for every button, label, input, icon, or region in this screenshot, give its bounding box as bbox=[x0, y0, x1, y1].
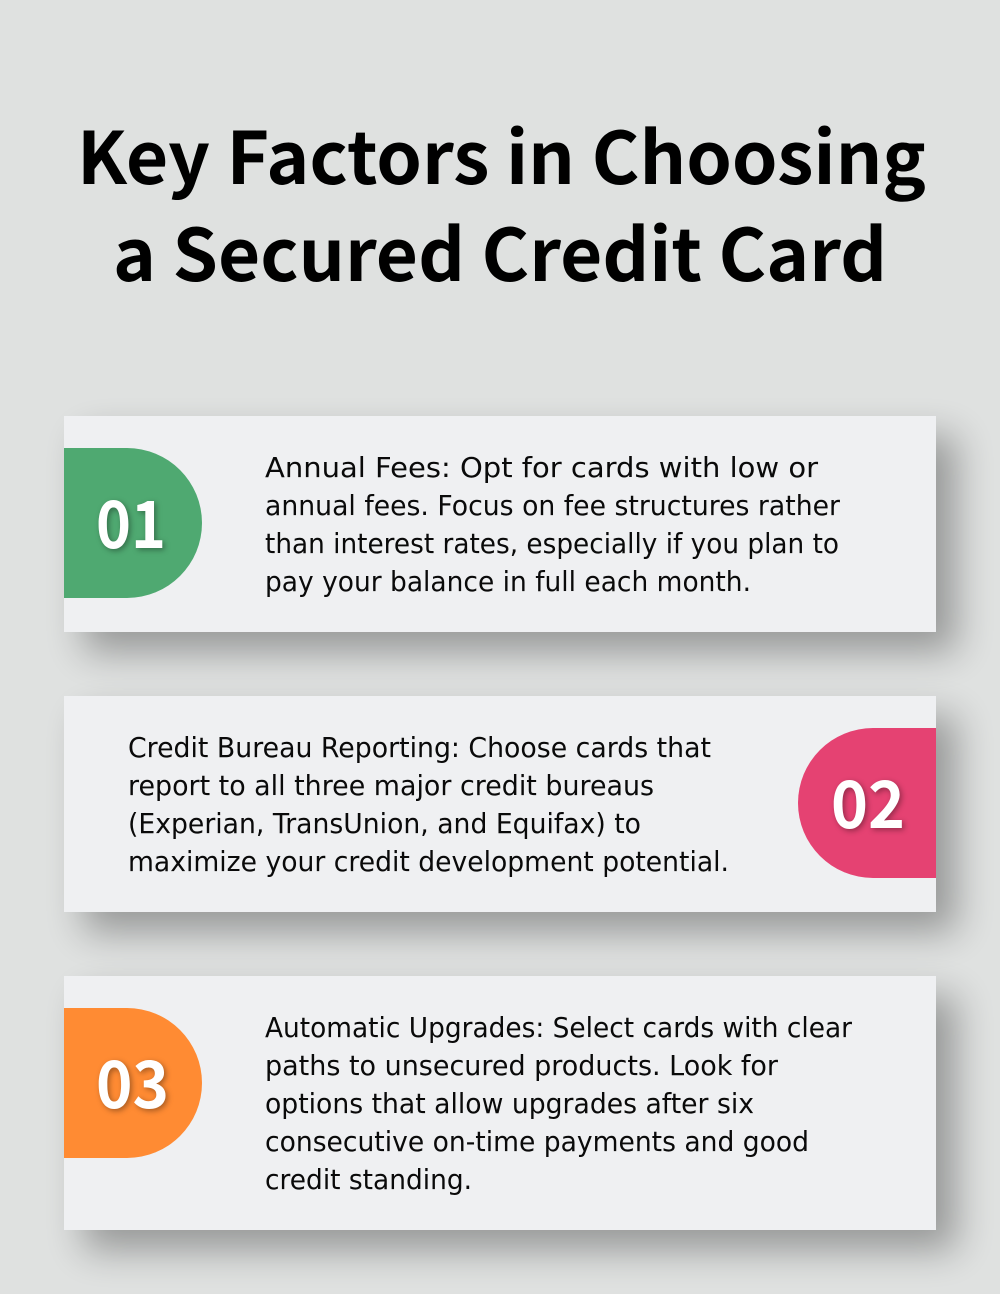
text: automatic upgrades: credit standing. bbox=[265, 1163, 472, 1196]
badge: 01 bbox=[64, 448, 202, 598]
text: credit bureau reporting: report to all three major credit bureaus bbox=[128, 769, 654, 802]
badge: 02: 02 bbox=[831, 753, 905, 847]
text: automatic upgrades: paths to unsecured products. Look for bbox=[265, 1049, 778, 1082]
panel: annual fees bbox=[64, 416, 956, 652]
badge: 01: 01 bbox=[96, 473, 166, 567]
text: credit bureau reporting: (Experian, TransUnion, and Equifax) to bbox=[128, 807, 641, 840]
text: annual fees bbox=[265, 451, 840, 598]
panel: credit bureau reporting bbox=[64, 696, 956, 932]
text: credit bureau reporting: Credit Bureau Reporting: Choose cards that bbox=[128, 731, 711, 764]
text: annual fees: Annual Fees: Opt for cards with low or bbox=[265, 451, 819, 484]
text: annual fees: than interest rates, especially if you plan to bbox=[265, 527, 839, 560]
text: automatic upgrades bbox=[265, 1011, 852, 1196]
title: Key Factors in Choosing bbox=[77, 100, 926, 205]
title bbox=[77, 100, 926, 302]
text: annual fees: annual fees. Focus on fee structures rather bbox=[265, 489, 840, 522]
title: a Secured Credit Card bbox=[113, 197, 887, 302]
text: credit bureau reporting: maximize your credit development potential. bbox=[128, 845, 729, 878]
text: annual fees: pay your balance in full each month. bbox=[265, 565, 751, 598]
text: credit bureau reporting bbox=[128, 731, 729, 878]
text: automatic upgrades: Automatic Upgrades: Select cards with clear bbox=[265, 1011, 852, 1044]
text: automatic upgrades: options that allow upgrades after six bbox=[265, 1087, 754, 1120]
badge: 02 bbox=[798, 728, 936, 878]
text: automatic upgrades: consecutive on-time payments and good bbox=[265, 1125, 809, 1158]
badge: 03: 03 bbox=[96, 1033, 169, 1127]
badge: 03 bbox=[64, 1008, 202, 1158]
panel: automatic upgrades bbox=[64, 976, 956, 1250]
